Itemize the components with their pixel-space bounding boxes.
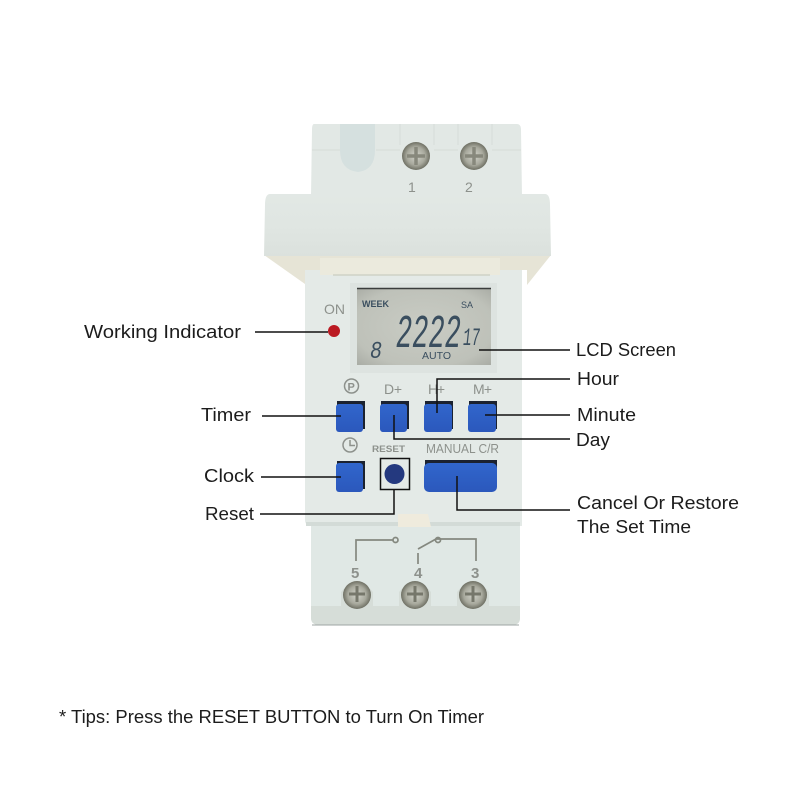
screw terminal 5 bbox=[343, 581, 371, 609]
red working light bbox=[328, 325, 340, 337]
terminal number 3: 3 bbox=[471, 565, 479, 582]
button labels bbox=[343, 379, 499, 456]
callout: timer bbox=[201, 405, 341, 425]
screw terminal 1 bbox=[402, 142, 430, 170]
minute button bbox=[468, 401, 497, 432]
H+: H+ bbox=[428, 381, 445, 397]
screw terminal 2 bbox=[460, 142, 488, 170]
AUTO: AUTO bbox=[422, 351, 451, 362]
callout: day bbox=[394, 415, 610, 450]
terminal number 5: 5 bbox=[351, 565, 359, 582]
tips note: * Tips: Press the RESET BUTTON to Turn On Timer bbox=[59, 707, 484, 727]
timer button bbox=[336, 401, 365, 432]
lower terminal block bbox=[311, 520, 520, 625]
callout: LCD screen: LCD Screen bbox=[576, 340, 676, 360]
hour button bbox=[424, 401, 453, 432]
relay contact diagram bbox=[356, 538, 476, 564]
Sa: SA bbox=[461, 300, 473, 310]
D+: D+ bbox=[384, 381, 402, 397]
callout: reset: Reset bbox=[205, 504, 254, 524]
clock icon bbox=[343, 438, 357, 452]
callout: cancel or restore: The Set Time bbox=[577, 517, 691, 537]
RESET: RESET bbox=[372, 444, 405, 455]
day digit: 8 bbox=[370, 339, 382, 366]
callout: cancel or restore bbox=[457, 476, 739, 537]
upper terminal block bbox=[311, 124, 522, 196]
ON label: ON bbox=[324, 301, 345, 317]
day button bbox=[380, 401, 409, 432]
callout: clock bbox=[204, 466, 341, 486]
MANUAL C/R: MANUAL C/R bbox=[426, 441, 499, 456]
hinged cover bbox=[264, 194, 551, 285]
terminal number 2: 2 bbox=[465, 179, 473, 195]
front panel bbox=[305, 270, 522, 527]
P icon bbox=[344, 379, 358, 394]
callout: minute: Minute bbox=[577, 405, 636, 425]
callout: clock: Clock bbox=[204, 466, 255, 486]
callout: cancel or restore: Cancel Or Restore bbox=[577, 493, 739, 513]
seconds digits: 17 bbox=[463, 324, 480, 353]
callout: hour bbox=[437, 369, 619, 413]
P icon: P bbox=[348, 382, 355, 394]
callout: hour: Hour bbox=[577, 369, 619, 389]
callout: timer: Timer bbox=[201, 405, 251, 425]
manual button bbox=[424, 460, 497, 492]
time digits: 2222 bbox=[396, 309, 461, 362]
callout: reset bbox=[205, 458, 410, 524]
terminal number 4: 4 bbox=[414, 565, 423, 582]
screw terminal 3 bbox=[459, 581, 487, 609]
callout: working indicator: Working Indicator bbox=[84, 322, 241, 342]
indicator bbox=[324, 301, 345, 337]
blue buttons bbox=[336, 401, 497, 492]
terminal number 1: 1 bbox=[408, 179, 416, 195]
LCD screen bbox=[350, 283, 497, 373]
M+: M+ bbox=[473, 381, 492, 397]
callout: day: Day bbox=[576, 430, 610, 450]
WEEK: WEEK bbox=[362, 299, 390, 309]
reset button bbox=[384, 464, 404, 484]
clock button bbox=[336, 461, 365, 492]
device bbox=[264, 124, 551, 625]
screw terminal 4 bbox=[401, 581, 429, 609]
